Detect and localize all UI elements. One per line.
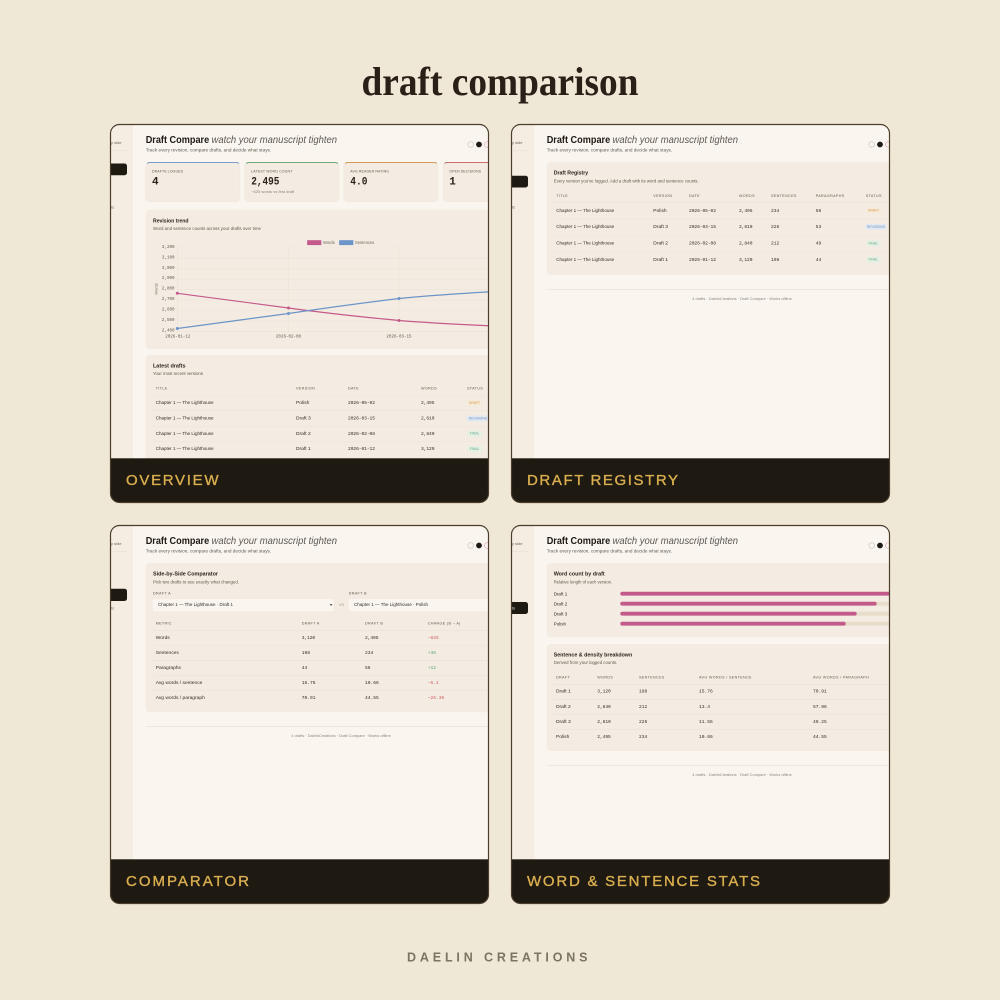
panel: side-by-side comparator: 70.91 bbox=[302, 695, 316, 701]
panel: side-by-side comparator: 2,495 bbox=[365, 635, 379, 641]
app header: watch your manuscript tighten bbox=[612, 536, 738, 547]
panel: sentence and density breakdown: 2,840 bbox=[597, 704, 611, 710]
panel: registry table: SENTENCES bbox=[771, 194, 797, 198]
sidebar: y side bbox=[512, 541, 523, 546]
panel: sentence and density breakdown: 13.4 bbox=[699, 704, 710, 710]
panel: latest drafts: Draft 1 bbox=[296, 446, 311, 452]
panel: latest drafts: STATUS bbox=[467, 386, 483, 390]
panel: side-by-side comparator: Paragraphs bbox=[156, 665, 182, 671]
draft selectors bbox=[153, 591, 499, 611]
app header: watch your manuscript tighten bbox=[212, 135, 337, 146]
panel: comparator bbox=[105, 525, 506, 904]
panel: sentence and density breakdown: Draft 3 bbox=[556, 719, 571, 725]
stat card: drafts logged: 4 bbox=[152, 177, 159, 189]
app header: Draft Compare bbox=[146, 135, 209, 146]
panel: side-by-side comparator: +12 bbox=[428, 665, 436, 671]
panel: side-by-side comparator: Sentences bbox=[156, 650, 179, 656]
panel: latest drafts: TITLE bbox=[156, 386, 168, 390]
panel: registry table: STATUS bbox=[866, 194, 882, 198]
stat card: drafts logged: DRAFTS LOGGED bbox=[152, 170, 184, 174]
panel: draft registry bbox=[506, 124, 907, 503]
panel: sentence and density breakdown: DRAFT bbox=[556, 675, 570, 679]
draft selectors: VS bbox=[339, 603, 345, 607]
panel: side-by-side comparator: 3,120 bbox=[302, 635, 315, 641]
panel: latest drafts: 2,610 bbox=[421, 416, 435, 422]
draft selectors: DRAFT B bbox=[349, 591, 367, 595]
draft selectors: Chapter 1 — The Lighthouse · Polish bbox=[354, 602, 428, 608]
panel: registry table: FINAL bbox=[868, 241, 878, 245]
panel: sentence and density breakdown: 234 bbox=[639, 734, 648, 740]
panel: registry table: 2026-03-15 bbox=[689, 224, 716, 230]
stat card: latest word count: −625 words vs first draft bbox=[251, 190, 294, 194]
app header: Track every revision, compare drafts, and decide what stays. bbox=[146, 147, 271, 153]
panel: registry table: 53 bbox=[816, 224, 821, 230]
panel: registry table: Draft 1 bbox=[653, 257, 668, 263]
panel: latest drafts: 2026-03-15 bbox=[348, 416, 375, 422]
app header bbox=[547, 135, 891, 153]
panel: registry table: 2026-02-08 bbox=[689, 241, 716, 247]
panel: sentence and density breakdown: 226 bbox=[639, 719, 648, 725]
panel: registry table: 212 bbox=[771, 241, 780, 247]
panel: latest drafts: Your most recent versions bbox=[153, 371, 204, 377]
panel: registry table: WORDS bbox=[739, 194, 755, 198]
panel: side-by-side comparator: 44.55 bbox=[365, 695, 379, 701]
line chart: 2,600 bbox=[162, 308, 175, 312]
line chart: 2026-03-15 bbox=[386, 336, 412, 340]
sidebar: ts bbox=[111, 204, 114, 210]
panel: word count by draft bbox=[547, 563, 907, 637]
panel: sentence and density breakdown: 2,495 bbox=[597, 734, 611, 740]
panel: side-by-side comparator: Avg words / paragraph bbox=[156, 695, 205, 701]
panel: sentence and density breakdown: 15.76 bbox=[699, 688, 713, 694]
panel: word count by draft: Relative length of each version. bbox=[554, 580, 612, 586]
draft selectors: DRAFT A bbox=[153, 591, 171, 595]
panel: sentence and density breakdown: AVG WORDS / PARAGRAPH bbox=[813, 675, 869, 679]
panel: registry table: Chapter 1 — The Lighthouse bbox=[556, 241, 614, 247]
panel: latest drafts: Chapter 1 — The Lighthouse bbox=[156, 400, 214, 406]
panel: word and sentence stats bbox=[506, 525, 907, 904]
app footer: 4 drafts · DaelinCreations · Draft Compare · Works offline bbox=[692, 296, 792, 301]
panel: latest drafts: 2026-05-02 bbox=[348, 400, 375, 406]
panel: sentence and density breakdown: 57.96 bbox=[813, 704, 827, 710]
app footer: 4 drafts · DaelinCreations · Draft Compare · Works offline bbox=[692, 772, 792, 777]
line chart: 3,100 bbox=[162, 256, 175, 260]
app header: Draft Compare bbox=[547, 536, 610, 547]
caption band: DRAFT REGISTRY bbox=[527, 472, 678, 489]
panel: sentence and density breakdown: 2,610 bbox=[597, 719, 611, 725]
panel: sentence and density breakdown: Sentence & density breakdown bbox=[554, 653, 632, 659]
panel: latest drafts: Chapter 1 — The Lighthouse bbox=[156, 416, 214, 422]
panel: registry table bbox=[547, 162, 907, 275]
panel: latest drafts: Draft 3 bbox=[296, 416, 311, 422]
panel: registry table: 226 bbox=[771, 224, 780, 230]
panel: registry table: 2,610 bbox=[739, 224, 753, 230]
app header bbox=[146, 135, 490, 153]
panel: sentence and density breakdown: WORDS bbox=[597, 675, 613, 679]
panel: registry table: 2026-01-12 bbox=[689, 257, 716, 263]
panel: latest drafts: 2026-01-12 bbox=[348, 446, 375, 452]
panel: side-by-side comparator: DRAFT A bbox=[302, 621, 320, 625]
panel: latest drafts: DATE bbox=[348, 386, 359, 390]
line chart bbox=[154, 246, 495, 340]
panel: registry table: TITLE bbox=[556, 194, 568, 198]
footer credit: DAELIN CREATIONS bbox=[407, 950, 588, 964]
stat card: avg reader rating: 4.0 bbox=[350, 177, 368, 189]
panel: registry table: VERSION bbox=[653, 194, 672, 198]
panel: latest drafts: Polish bbox=[296, 400, 310, 406]
panel: side-by-side comparator: CHANGE (B − A) bbox=[428, 621, 461, 625]
panel: latest drafts: 2026-02-08 bbox=[348, 431, 375, 437]
panel: sentence and density breakdown: 3,120 bbox=[597, 688, 611, 694]
panel: registry table: 2,840 bbox=[739, 241, 753, 247]
panel: latest drafts: Draft 2 bbox=[296, 431, 311, 437]
panel: sentence and density breakdown bbox=[547, 644, 907, 751]
panel: side-by-side comparator: 44 bbox=[302, 665, 307, 671]
panel: side-by-side comparator: Words bbox=[156, 635, 170, 641]
panel: sentence and density breakdown: 198 bbox=[639, 688, 648, 694]
panel: side-by-side comparator: +36 bbox=[428, 650, 436, 656]
line chart: 2026-01-12 bbox=[165, 336, 191, 340]
line chart: 2,400 bbox=[162, 329, 175, 333]
panel: side-by-side comparator: Pick two drafts to see exactly what changed. bbox=[153, 580, 239, 586]
panel: registry table: 2,495 bbox=[739, 208, 753, 214]
panel: registry table: 234 bbox=[771, 208, 780, 214]
panel: latest drafts: VERSION bbox=[296, 386, 315, 390]
panel: registry table: 3,120 bbox=[739, 257, 753, 263]
panel: registry table: 44 bbox=[816, 257, 821, 263]
line chart: 2,500 bbox=[162, 319, 175, 323]
line chart: 2,700 bbox=[162, 298, 175, 302]
panel: side-by-side comparator: METRIC bbox=[156, 621, 172, 625]
stat card: drafts logged bbox=[146, 162, 240, 202]
line chart: 3,200 bbox=[162, 246, 175, 250]
app header: Draft Compare bbox=[146, 536, 209, 547]
stat card: open decisions: OPEN DECISIONS bbox=[449, 170, 482, 174]
panel: registry table: DATE bbox=[689, 194, 700, 198]
line chart: 2,900 bbox=[162, 277, 175, 281]
panel: registry table: Every version you've logged. Add a draft with its word and sentence counts. bbox=[554, 179, 699, 185]
panel: registry table: PARAGRAPHS bbox=[816, 194, 845, 198]
line chart: Words bbox=[154, 283, 158, 295]
panel: overview bbox=[110, 124, 490, 504]
app header: Track every revision, compare drafts, and decide what stays. bbox=[547, 548, 672, 554]
panel: side-by-side comparator: Side-by-Side Comparator bbox=[153, 572, 219, 578]
sidebar bbox=[111, 125, 133, 458]
app header: watch your manuscript tighten bbox=[212, 536, 337, 547]
panel: latest drafts: 3,120 bbox=[421, 446, 435, 452]
stat card: avg reader rating: AVG READER RATING bbox=[350, 170, 389, 174]
panel: latest drafts: Chapter 1 — The Lighthouse bbox=[156, 446, 214, 452]
sidebar: ts bbox=[512, 204, 515, 210]
caption band: WORD & SENTENCE STATS bbox=[527, 873, 760, 890]
panel: sentence and density breakdown: 11.55 bbox=[699, 719, 713, 725]
panel: revision trend: Revision trend bbox=[153, 219, 188, 225]
panel: sentence and density breakdown: 70.91 bbox=[813, 688, 827, 694]
caption band bbox=[511, 458, 890, 503]
caption band bbox=[511, 859, 890, 904]
title: draft comparison bbox=[362, 59, 638, 104]
panel: side-by-side comparator: 234 bbox=[365, 650, 374, 656]
bar chart: Draft 2 bbox=[554, 601, 568, 606]
sidebar bbox=[111, 526, 133, 859]
panel: latest drafts: 2,495 bbox=[421, 400, 435, 406]
panel: sentence and density breakdown: Draft 1 bbox=[556, 688, 571, 694]
panel: registry table: Draft 3 bbox=[653, 224, 668, 230]
panel: registry table: Chapter 1 — The Lighthouse bbox=[556, 208, 614, 214]
caption band: OVERVIEW bbox=[126, 472, 219, 489]
caption band bbox=[110, 458, 489, 503]
bar chart: Draft 3 bbox=[554, 611, 568, 616]
app header bbox=[547, 536, 891, 554]
panel: registry table: REVISIONS bbox=[867, 225, 886, 229]
panel: latest drafts: Latest drafts bbox=[153, 364, 186, 370]
panel: side-by-side comparator: 198 bbox=[302, 650, 310, 656]
panel: sentence and density breakdown: 44.55 bbox=[813, 734, 827, 740]
panel: sentence and density breakdown: SENTENCES bbox=[639, 675, 665, 679]
panel: registry table: Polish bbox=[653, 208, 667, 214]
sidebar: y side bbox=[111, 140, 122, 145]
stat card: latest word count bbox=[244, 162, 339, 202]
sidebar bbox=[512, 125, 534, 458]
panel: side-by-side comparator: 56 bbox=[365, 665, 371, 671]
panel: registry table: 56 bbox=[816, 208, 821, 214]
panel: word count by draft: Word count by draft bbox=[554, 572, 605, 578]
panel: latest drafts: Chapter 1 — The Lighthouse bbox=[156, 431, 214, 437]
panel: sentence and density breakdown: 10.66 bbox=[699, 734, 713, 740]
app footer: 4 drafts · DaelinCreations · Draft Compare · Works offline bbox=[291, 733, 391, 738]
sidebar: y side bbox=[512, 140, 523, 145]
bar chart: Polish bbox=[554, 621, 566, 626]
panel: latest drafts bbox=[146, 355, 488, 458]
panel: side-by-side comparator: 10.66 bbox=[365, 680, 379, 686]
panel: sentence and density breakdown: Polish bbox=[556, 734, 570, 740]
panel: latest drafts: FINAL bbox=[470, 432, 480, 436]
caption band: COMPARATOR bbox=[126, 873, 249, 890]
caption band bbox=[110, 859, 489, 904]
panel: registry table: Draft Registry bbox=[554, 171, 588, 177]
panel: sentence and density breakdown: AVG WORDS / SENTENCE bbox=[699, 675, 752, 679]
line chart: 2,800 bbox=[162, 288, 175, 292]
bar chart bbox=[554, 591, 902, 626]
panel: side-by-side comparator: −625 bbox=[428, 635, 439, 641]
panel: side-by-side comparator: DRAFT B bbox=[365, 621, 383, 625]
panel: registry table: 2026-05-02 bbox=[689, 208, 716, 214]
panel: side-by-side comparator bbox=[146, 563, 506, 712]
panel: side-by-side comparator: −5.1 bbox=[428, 680, 439, 686]
panel: latest drafts: 2,840 bbox=[421, 431, 435, 437]
panel: registry table: 49 bbox=[816, 241, 821, 247]
panel: sentence and density breakdown: 49.25 bbox=[813, 719, 827, 725]
app header: Track every revision, compare drafts, and decide what stays. bbox=[547, 147, 672, 153]
stat card: latest word count: 2,495 bbox=[251, 177, 280, 189]
sidebar: y side bbox=[111, 541, 122, 546]
panel: latest drafts: REVISIONS bbox=[469, 416, 488, 420]
app header: Track every revision, compare drafts, and decide what stays. bbox=[146, 548, 271, 554]
chart legend: Sentences bbox=[355, 240, 374, 245]
panel: latest drafts: DRAFT bbox=[469, 401, 480, 405]
line chart: 3,000 bbox=[162, 267, 175, 271]
app header bbox=[146, 536, 490, 554]
chart legend: Words bbox=[323, 240, 335, 245]
stat card: avg reader rating bbox=[344, 162, 438, 202]
panel: sentence and density breakdown: 212 bbox=[639, 704, 648, 710]
panel: registry table: FINAL bbox=[868, 258, 878, 262]
panel: registry table: Chapter 1 — The Lighthouse bbox=[556, 224, 614, 230]
panel: registry table: 198 bbox=[771, 257, 780, 263]
panel: sentence and density breakdown: Derived from your logged counts. bbox=[554, 660, 617, 666]
panel: registry table: Chapter 1 — The Lighthouse bbox=[556, 257, 614, 263]
panel: revision trend bbox=[146, 210, 506, 349]
chart legend bbox=[307, 240, 374, 245]
panel: revision trend: Word and sentence counts across your drafts over time bbox=[153, 226, 261, 232]
bar chart: Draft 1 bbox=[554, 591, 568, 596]
stat card: open decisions bbox=[442, 162, 488, 202]
sidebar: ts bbox=[111, 606, 114, 610]
app header: Draft Compare bbox=[547, 135, 610, 146]
panel: latest drafts: WORDS bbox=[421, 386, 437, 390]
draft selectors: Chapter 1 — The Lighthouse · Draft 1 bbox=[158, 602, 233, 608]
panel: registry table: Draft 2 bbox=[653, 241, 668, 247]
panel: side-by-side comparator: 15.76 bbox=[302, 680, 316, 686]
app header: watch your manuscript tighten bbox=[612, 135, 738, 146]
panel: registry table: DRAFT bbox=[868, 209, 879, 213]
stat card: open decisions: 1 bbox=[449, 177, 456, 189]
panel: side-by-side comparator: Avg words / sentence bbox=[156, 680, 203, 686]
panel: side-by-side comparator: −26.36 bbox=[428, 695, 444, 701]
stat card: latest word count: LATEST WORD COUNT bbox=[251, 170, 293, 174]
sidebar bbox=[512, 526, 534, 859]
panel: sentence and density breakdown: Draft 2 bbox=[556, 704, 571, 710]
line chart: 2026-02-08 bbox=[276, 336, 302, 340]
panel: latest drafts: FINAL bbox=[470, 447, 480, 451]
sidebar: ts bbox=[512, 606, 515, 610]
